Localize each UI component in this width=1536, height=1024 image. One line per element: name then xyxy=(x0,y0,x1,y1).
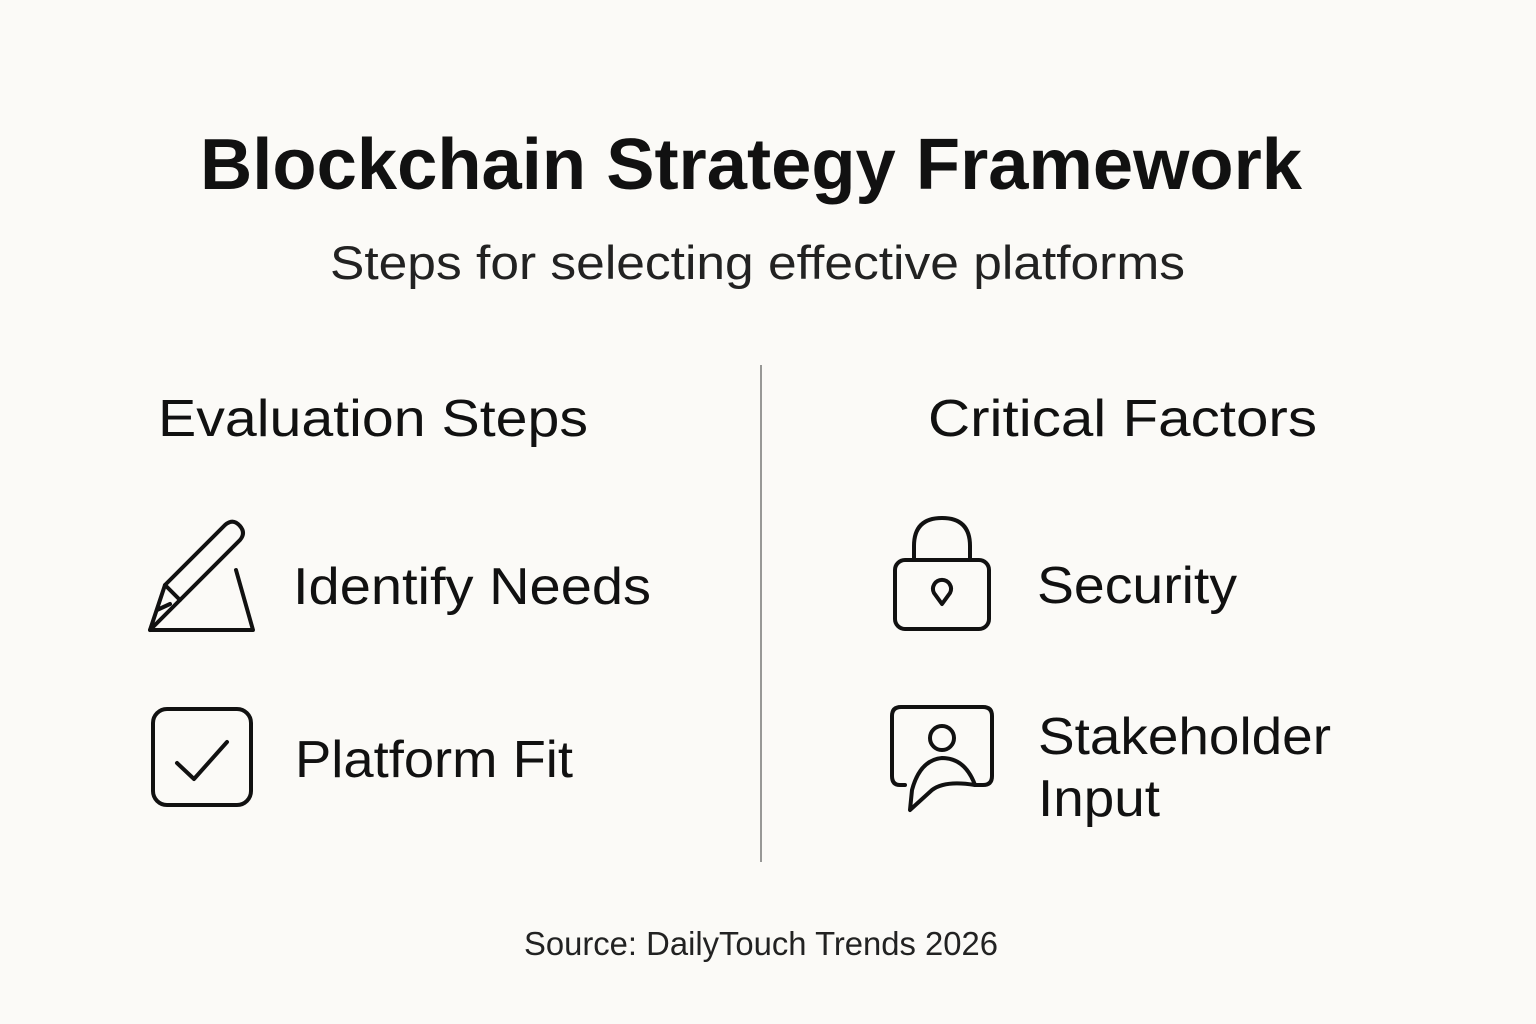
label: stakeholder input: Stakeholder xyxy=(1038,708,1331,766)
heading: critical factors: Critical Factors xyxy=(928,390,1317,448)
icon: lock xyxy=(895,518,989,629)
icon: pencil xyxy=(150,522,253,630)
title: Blockchain Strategy Framework xyxy=(200,125,1303,205)
label: identify needs: Identify Needs xyxy=(293,558,651,616)
subtitle: Steps for selecting effective platforms xyxy=(330,236,1185,289)
source: Source: DailyTouch Trends 2026 xyxy=(524,925,998,962)
panel: critical factors: Input xyxy=(1038,770,1161,828)
panel: evaluation steps xyxy=(150,390,651,805)
panel: critical factors xyxy=(892,390,1331,828)
icon: checkbox xyxy=(153,709,251,805)
icon: stakeholder xyxy=(892,707,992,810)
heading: evaluation steps: Evaluation Steps xyxy=(158,390,588,448)
label: platform fit: Platform Fit xyxy=(295,731,574,789)
label: security: Security xyxy=(1037,557,1237,615)
